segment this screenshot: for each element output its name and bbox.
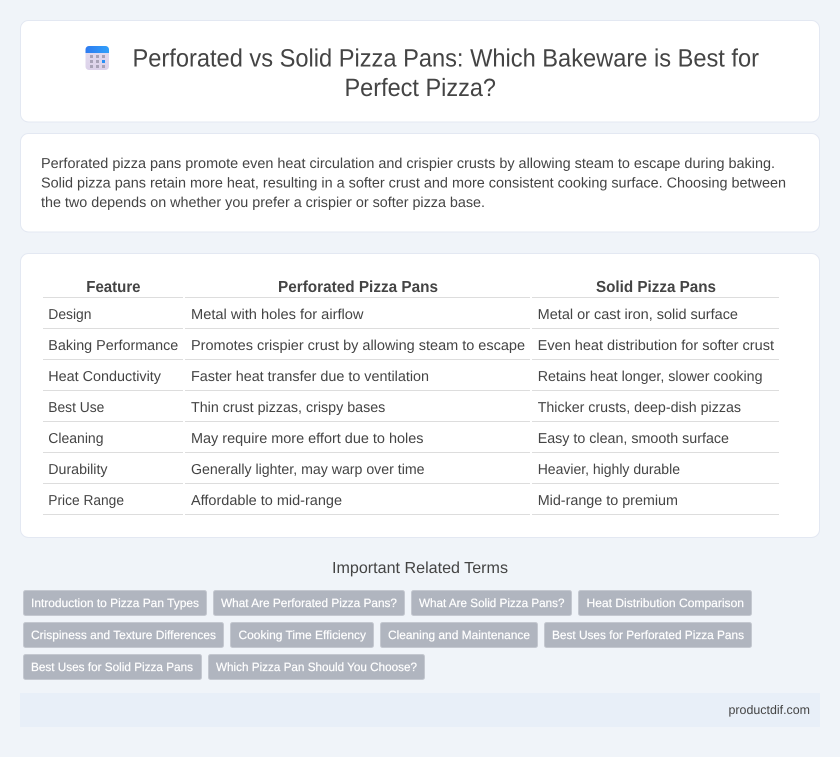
row: best use: Thin crust pizzas, crispy bases — [191, 400, 385, 416]
tag — [380, 622, 538, 648]
row: baking performance: Baking Performance — [48, 338, 178, 354]
related terms tags — [24, 590, 752, 680]
title: Perfect Pizza? — [344, 74, 496, 102]
row: heat conductivity: Heat Conductivity — [48, 369, 162, 385]
row: cleaning: Cleaning — [48, 431, 104, 447]
tag — [24, 622, 224, 648]
row: design: Design — [48, 307, 92, 323]
tag — [24, 654, 202, 680]
tag — [544, 622, 752, 648]
tag — [208, 654, 424, 680]
tag: Best Uses for Perforated Pizza Pans — [552, 628, 744, 642]
row: price range: Affordable to mid-range — [191, 493, 342, 509]
header panel — [20, 20, 820, 122]
table header: Solid Pizza Pans — [596, 279, 716, 296]
tag: Cleaning and Maintenance — [388, 628, 530, 642]
icon: calendar — [86, 46, 109, 70]
row: durability: Generally lighter, may warp over time — [191, 462, 424, 478]
intro text: Perforated pizza pans promote even heat circulation and crispier crusts by allowing steam to escape during baking. — [41, 156, 775, 172]
row: design — [48, 307, 738, 323]
table header — [86, 279, 716, 296]
title: Perforated vs Solid Pizza Pans: Which Bakeware is Best for — [132, 44, 759, 72]
row: best use: Thicker crusts, deep-dish pizzas — [538, 400, 741, 416]
row: cleaning: Easy to clean, smooth surface — [538, 431, 729, 447]
table header: Feature — [86, 279, 141, 296]
row: heat conductivity: Faster heat transfer due to ventilation — [191, 369, 429, 385]
row: cleaning: May require more effort due to holes — [191, 431, 424, 447]
tag — [412, 590, 572, 616]
row: price range: Mid-range to premium — [538, 493, 678, 509]
tag: Cooking Time Efficiency — [238, 628, 366, 642]
row: cleaning — [48, 431, 729, 447]
row: price range: Price Range — [48, 493, 124, 509]
row: baking performance: Promotes crispier crust by allowing steam to escape — [191, 338, 525, 354]
tag — [230, 622, 374, 648]
footer bar — [20, 693, 820, 727]
title — [132, 44, 759, 102]
row: best use — [48, 400, 741, 416]
related terms heading: Important Related Terms — [332, 560, 508, 577]
tag — [214, 590, 404, 616]
intro panel — [20, 134, 820, 232]
tag: Crispiness and Texture Differences — [31, 628, 216, 642]
comparison table panel — [20, 254, 820, 538]
intro text: the two depends on whether you prefer a crispier or softer pizza base. — [41, 195, 485, 211]
row: durability: Durability — [48, 462, 108, 478]
tag: Heat Distribution Comparison — [586, 596, 744, 610]
row: durability — [48, 462, 680, 478]
row: heat conductivity: Retains heat longer, slower cooking — [538, 369, 762, 385]
row: best use: Best Use — [48, 400, 104, 416]
intro text — [41, 156, 786, 211]
row: price range — [48, 493, 678, 509]
footer bar: productdif.com — [728, 703, 810, 717]
row: durability: Heavier, highly durable — [538, 462, 680, 478]
tag — [578, 590, 752, 616]
intro text: Solid pizza pans retain more heat, resulting in a softer crust and more consistent cooking surface. Choosing between — [41, 176, 786, 192]
tag: What Are Solid Pizza Pans? — [419, 596, 565, 610]
tag: Best Uses for Solid Pizza Pans — [31, 660, 193, 674]
row: design: Metal or cast iron, solid surface — [538, 307, 738, 323]
row: baking performance: Even heat distribution for softer crust — [538, 338, 774, 354]
tag: Which Pizza Pan Should You Choose? — [216, 660, 417, 674]
table header: Perforated Pizza Pans — [278, 279, 438, 296]
tag — [24, 590, 206, 616]
tag: What Are Perforated Pizza Pans? — [221, 596, 397, 610]
tag: Introduction to Pizza Pan Types — [31, 596, 199, 610]
row: heat conductivity — [48, 369, 763, 385]
row: design: Metal with holes for airflow — [191, 307, 364, 323]
row: baking performance — [48, 338, 774, 354]
